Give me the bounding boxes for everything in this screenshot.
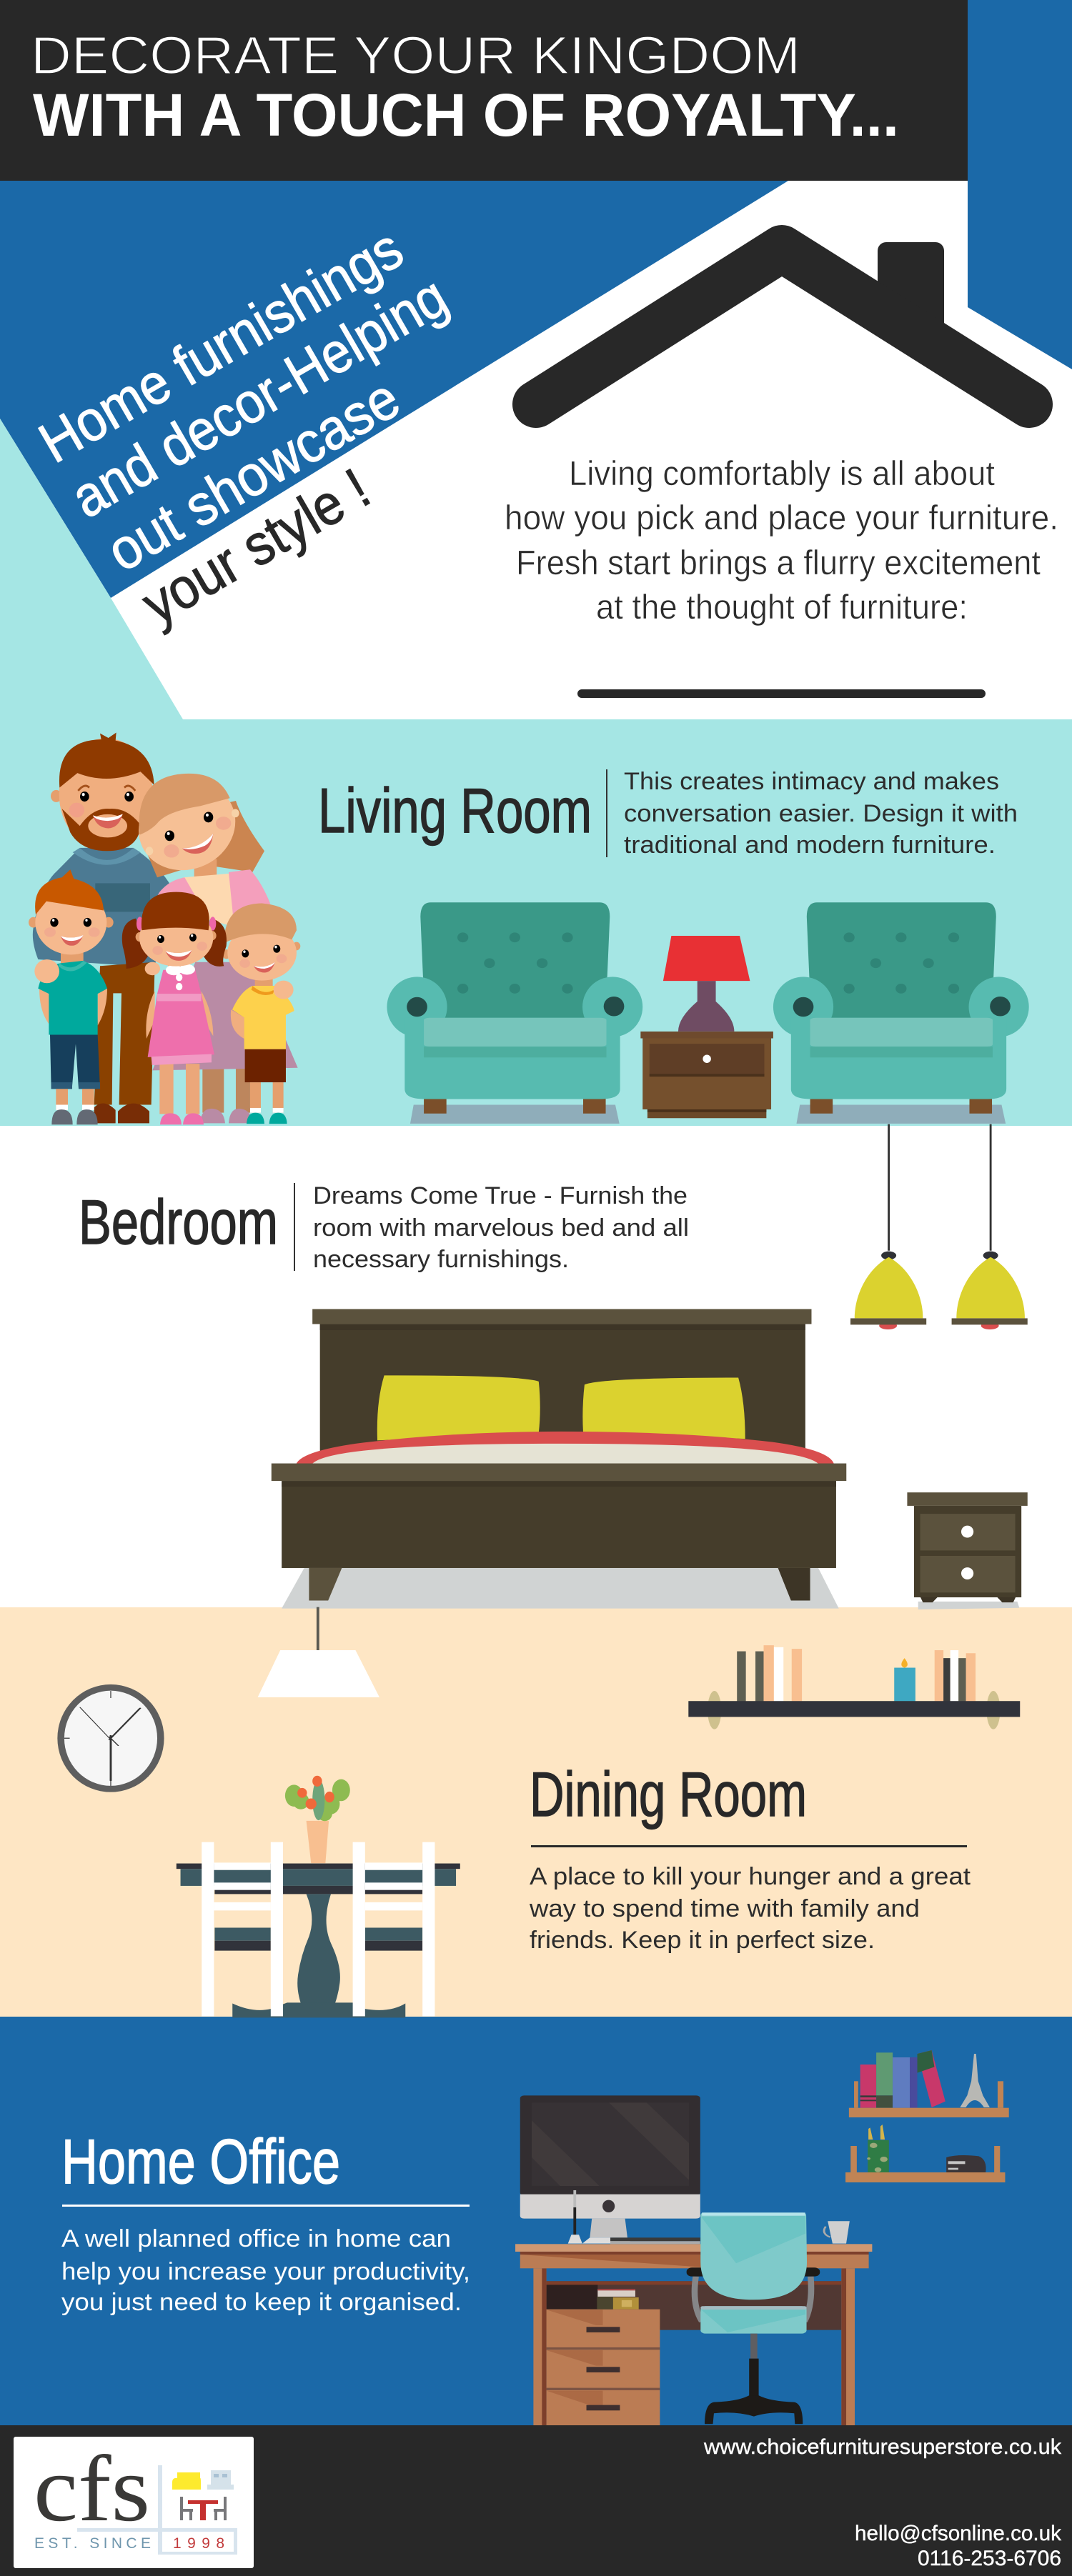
mom head: [130, 771, 244, 882]
panel: bedroom: [79, 1124, 1028, 1609]
icon: right armchair: [773, 902, 1029, 1124]
logo: cfs: [14, 2436, 254, 2568]
text: dining room description: way to spend time with family and: [529, 1895, 920, 1922]
intro text: [505, 455, 1058, 626]
icon: nightstand: [907, 1492, 1028, 1609]
girl: [122, 919, 149, 969]
icon: yellow sofa: [172, 2472, 201, 2490]
text: home office description: help you increase your productivity,: [61, 2258, 470, 2285]
icon: bed: [207, 2470, 234, 2490]
icon: wall clock: [57, 1684, 164, 1792]
slanted tagline: your style !: [131, 456, 380, 636]
contact: email and phone: hello@cfsonline.co.uk: [855, 2522, 1062, 2545]
family illustration: [29, 733, 300, 1124]
icon: hanging lamp: [258, 1607, 379, 1697]
icon: dining set: [180, 2497, 227, 2520]
floor bar: [577, 689, 986, 698]
text: bedroom description: room with marvelous bed and all: [313, 1214, 689, 1242]
intro text: Living comfortably is all about: [569, 455, 995, 493]
contact: email and phone: [855, 2522, 1062, 2570]
intro text: at the thought of furniture:: [596, 589, 968, 626]
text: dining room description: [529, 1863, 971, 1954]
icon: side table with red lamp: [640, 936, 773, 1118]
title banner: WITH A TOUCH OF ROYALTY...: [33, 81, 899, 149]
contact: website: www.choicefurnituresuperstore.co.uk: [703, 2435, 1062, 2459]
slanted tagline: and decor-Helping: [61, 264, 457, 530]
heading: Dining Room: Dining Room: [530, 1759, 807, 1829]
text: bedroom description: [313, 1182, 689, 1273]
slanted tagline: Home furnishings: [29, 216, 413, 475]
text: living room description: This creates intimacy and makes: [624, 768, 999, 795]
icon: office chair: [687, 2212, 820, 2424]
icon: wall shelf with books and candle: [688, 1645, 1020, 1729]
text: living room description: traditional and modern furniture.: [624, 832, 996, 859]
icon: bed: [272, 1309, 846, 1609]
text: living room description: [624, 768, 1018, 859]
logo: cfs: 1998: [173, 2535, 224, 2552]
logo: cfs: EST. SINCE: [34, 2535, 151, 2552]
text: bedroom description: necessary furnishings.: [313, 1246, 569, 1273]
icon: left armchair: [387, 902, 642, 1124]
icon: desk and monitor: [515, 2095, 872, 2425]
title banner: [0, 0, 968, 181]
icon: dining table with chairs: [177, 1776, 460, 2017]
text: living room description: conversation easier. Design it with: [624, 800, 1018, 827]
panel: dining room: [57, 1607, 1020, 2017]
coffee mug: [824, 2221, 850, 2244]
intro text: how you pick and place your furniture.: [505, 499, 1058, 537]
panel: home office: [61, 2050, 1009, 2425]
drawers: [547, 2310, 660, 2425]
dad body: [33, 848, 169, 967]
text: dining room description: friends. Keep it in perfect size.: [530, 1927, 875, 1954]
text: home office description: A well planned office in home can: [61, 2225, 451, 2252]
heading: Home Office: Home Office: [61, 2126, 340, 2197]
heading: Living Room: Living Room: [318, 775, 592, 846]
text: home office description: you just need to keep it organised.: [61, 2289, 462, 2316]
panel: hero with roof and introduction: [0, 0, 1072, 719]
icon: house roof: [536, 242, 1029, 404]
intro text: Fresh start brings a flurry excitement: [516, 544, 1041, 582]
boy two: [250, 1082, 261, 1113]
title banner: DECORATE YOUR KINGDOM: [31, 26, 800, 85]
icon: pendant lamps: [850, 1124, 1028, 1329]
dad head: [51, 790, 61, 802]
books on drawer: [597, 2289, 639, 2310]
icon: wall shelves: [845, 2050, 1009, 2182]
mom body: [202, 1068, 224, 1113]
heading: Bedroom: Bedroom: [79, 1187, 278, 1257]
text: bedroom description: Dreams Come True - Furnish the: [313, 1182, 688, 1209]
text: home office description: [61, 2225, 470, 2316]
flowers in vase: [285, 1776, 350, 1863]
slanted tagline: [29, 216, 457, 636]
slanted tagline: out showcase: [96, 366, 410, 584]
boy one: [39, 989, 107, 1026]
monitor: [520, 2095, 700, 2244]
contact: email and phone: 0116-253-6706: [918, 2547, 1061, 2570]
panel: footer: [0, 2425, 1072, 2576]
text: dining room description: A place to kill your hunger and a great: [530, 1863, 971, 1890]
blue corner shape: [968, 0, 1072, 369]
panel: living room: [29, 733, 1029, 1124]
logo: cfs: cfs: [34, 2436, 150, 2541]
